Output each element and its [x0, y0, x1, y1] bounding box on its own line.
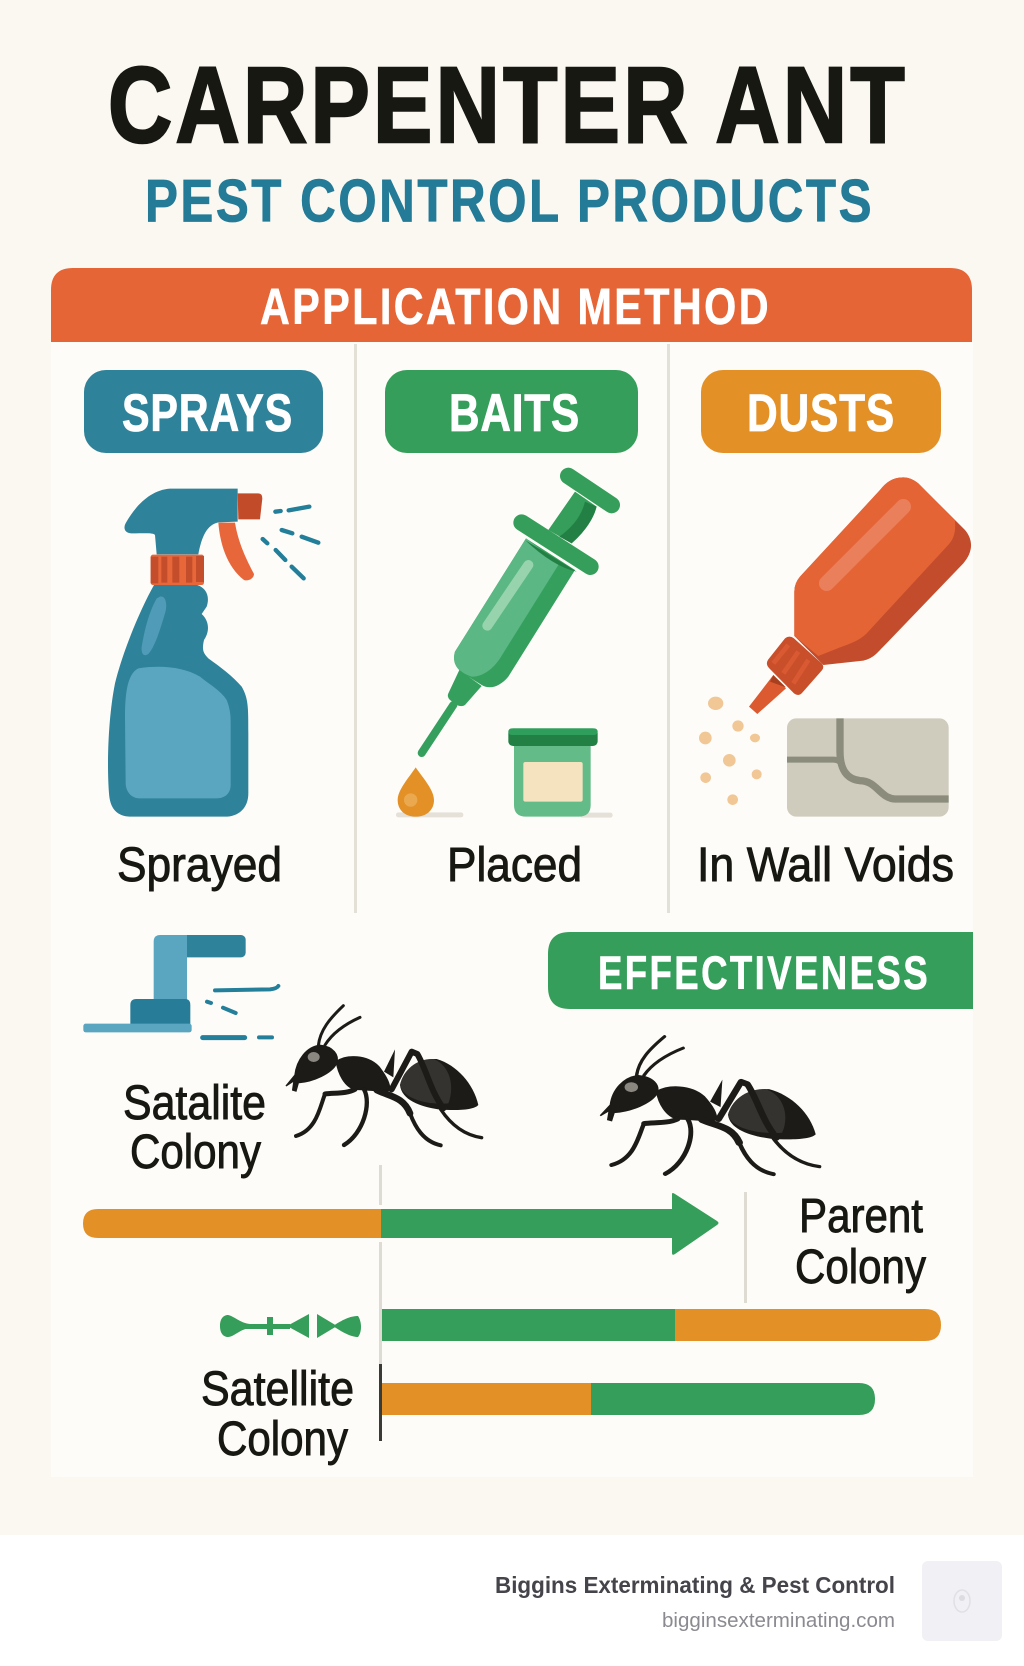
dark axis tick [379, 1364, 382, 1441]
divider near parent colony [744, 1192, 747, 1303]
label: satellite colony: Satellite [201, 1363, 354, 1416]
header: application method: APPLICATION METHOD [260, 278, 771, 335]
badge: sprays [84, 370, 323, 453]
divider below orange bar [379, 1242, 382, 1364]
label: satalite colony: Colony [130, 1126, 261, 1179]
label: parent colony [795, 1190, 926, 1294]
icon: dust particles [699, 697, 762, 805]
badge: effectiveness [548, 932, 973, 1009]
badge: dusts: DUSTS [747, 384, 895, 443]
label: placed: Placed [447, 839, 582, 892]
label: satalite colony [123, 1077, 266, 1179]
icon: ant upper left [286, 1006, 482, 1145]
icon: ant upper right [600, 1037, 819, 1174]
footer brand name: Biggins Exterminating & Pest Control [495, 1572, 895, 1598]
column divider left [354, 344, 357, 913]
arrow bar [83, 1193, 718, 1255]
label: satellite colony: Colony [217, 1413, 348, 1466]
badge: baits [385, 370, 638, 453]
icon: dust bottle [749, 477, 971, 714]
icon: bait syringe [422, 476, 612, 753]
label: satellite colony [201, 1363, 354, 1466]
column divider right [667, 344, 670, 913]
icon: wall crack [787, 718, 949, 817]
bar: green then orange [382, 1309, 941, 1341]
footer url: bigginsexterminating.com [662, 1610, 895, 1632]
badge: effectiveness: EFFECTIVENESS [598, 946, 930, 999]
label: sprayed: Sprayed [117, 839, 282, 892]
label: satalite colony: Satalite [123, 1077, 266, 1130]
icon: spray bottle [108, 489, 318, 817]
white content panel [51, 342, 973, 1477]
icon: blue applicator tool [83, 935, 278, 1038]
subtitle: PEST CONTROL PRODUCTS [145, 168, 874, 234]
badge: baits: BAITS [449, 384, 580, 443]
label: parent colony: Parent [799, 1190, 923, 1243]
divider above orange bar [379, 1165, 382, 1205]
icon: bait drop [396, 767, 463, 817]
badge: sprays: SPRAYS [122, 384, 293, 443]
icon: bait jar [508, 728, 613, 818]
footer band [0, 1535, 1024, 1666]
footer logo placeholder [922, 1561, 1002, 1641]
label: in wall voids: In Wall Voids [697, 839, 954, 892]
header: application method [51, 268, 972, 342]
label: parent colony: Colony [795, 1241, 926, 1294]
bar: orange then green [382, 1383, 875, 1415]
icon: green bait connector [220, 1314, 361, 1338]
badge: dusts [701, 370, 941, 453]
